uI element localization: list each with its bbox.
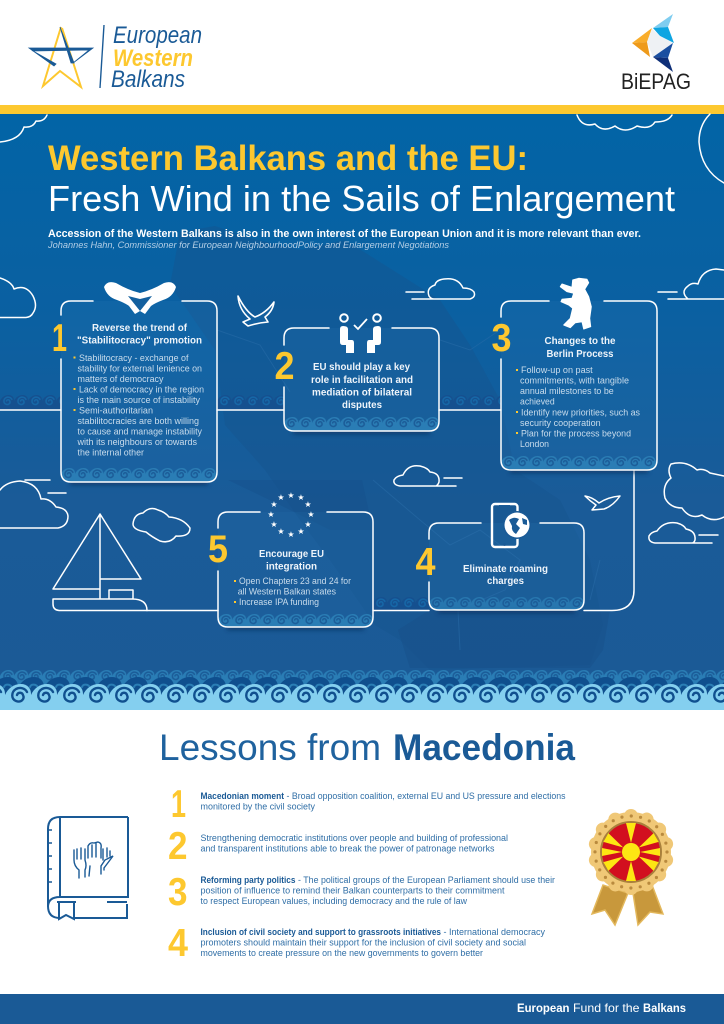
icon: sailing boat (53, 514, 147, 610)
lesson 4 (168, 922, 546, 965)
icon: book with raised hands (48, 817, 128, 919)
panel 4 heading: charges (487, 575, 524, 587)
heading: Lessons from Macedonia: Lessons from (159, 727, 381, 768)
panel 5 bullets: Increase IPA funding (239, 597, 319, 607)
panel 1 bullets: to cause and manage instability (78, 426, 203, 436)
lesson 3: 3 (168, 871, 188, 914)
panel 1 bullets: stability for external lenience on (78, 364, 202, 374)
icon: EU stars: ★ (277, 493, 285, 502)
panel 2 heading (311, 361, 413, 411)
icon: handshake (104, 282, 176, 314)
panel 3 bullets (516, 365, 641, 449)
lesson 2: 2 (168, 825, 188, 868)
panel 2 heading: mediation of bilateral (312, 386, 412, 398)
panel 3 bullets: annual milestones to be (520, 386, 614, 396)
panel 5 bullets: Open Chapters 23 and 24 for (239, 576, 351, 586)
icon: phone with globe (492, 504, 531, 547)
panel 2 (274, 314, 439, 434)
lesson 2: Strengthening democratic institutions over people and building of professional (200, 833, 508, 843)
icon: EU stars: ★ (267, 510, 275, 519)
panel 1 bullets: with its neighbours or towards (76, 437, 198, 447)
footer bar: European (517, 1001, 570, 1015)
icon: bird (585, 496, 620, 510)
title: Western Balkans and the EU: (48, 139, 528, 178)
number 5: 5 (208, 528, 228, 571)
lesson 4: movements to create pressure on the new governments to govern better (200, 948, 483, 958)
panel 2 heading: disputes (342, 399, 382, 411)
panel 3 heading: Changes to the (544, 335, 616, 347)
lesson 3: to respect European values, including democracy and the rule of law (200, 896, 468, 906)
footer bar (0, 994, 724, 1024)
icon: EU stars: ★ (287, 491, 295, 500)
lesson 3: - The political groups of the European Parliament should use their (298, 875, 555, 885)
icon: bird (238, 296, 274, 326)
number 1: 1 (52, 317, 67, 360)
panel 4 heading (463, 563, 548, 587)
logo: European Western Balkans (29, 22, 202, 93)
icon: EU stars: ★ (287, 530, 295, 539)
panel 1 bullets: Stabilitocracy - exchange of (79, 353, 189, 363)
panel 3 bullets: Follow-up on past (521, 365, 593, 375)
panel 5 (208, 491, 373, 630)
panel 1 (52, 282, 217, 485)
logo: European Western Balkans: Western (113, 45, 193, 72)
logo: European Western Balkans: Balkans (111, 66, 185, 93)
icon: EU stars: ★ (270, 500, 278, 509)
panel 5 heading: Encourage EU (259, 548, 324, 560)
panel 1 bullets: Semi-authoritarian (79, 406, 153, 416)
ocean waves (0, 670, 724, 710)
number 3: 3 (492, 317, 512, 360)
icon: EU stars: ★ (297, 493, 305, 502)
quote (47, 228, 641, 250)
lesson 2 (168, 825, 508, 868)
connector lines (0, 410, 634, 610)
panel 4 heading: Eliminate roaming (463, 563, 548, 575)
panel 3 bullets: London (520, 439, 549, 449)
icon: rosette with Macedonian flag (588, 809, 674, 925)
panel 3 (492, 278, 657, 473)
logo: European Western Balkans: European (113, 22, 202, 49)
panel 4 (416, 504, 584, 613)
lesson 3: Reforming party politics (200, 875, 296, 885)
lesson 1 (171, 783, 566, 826)
panel 5 heading (259, 548, 324, 572)
logo: BiEPAG (621, 14, 691, 94)
panel 3 bullets: security cooperation (520, 418, 601, 428)
panel 3 bullets: commitments, with tangible (520, 376, 629, 386)
panel 3 bullets: Identify new priorities, such as (521, 408, 641, 418)
lesson 3 (168, 871, 555, 914)
panel 3 bullets: achieved (520, 396, 555, 406)
yellow band (0, 105, 724, 114)
panel 1 bullets (74, 353, 204, 458)
icon: EU stars (267, 491, 315, 539)
panel 5 bullets (234, 576, 351, 607)
clouds (0, 114, 724, 543)
panel 2 heading: role in facilitation and (311, 374, 413, 386)
heading: Lessons from Macedonia: Macedonia (393, 727, 575, 768)
sea background panel (0, 114, 724, 710)
lesson 4: promoters should maintain their support for the inclusion of civil society and social (200, 938, 526, 948)
logo: BiEPAG: BiEPAG (621, 69, 691, 94)
quote: Accession of the Western Balkans is also in the own interest of the European Union and it is more relevant than ever. (48, 228, 641, 240)
panel 1 heading (77, 322, 202, 346)
lessons list (168, 783, 566, 965)
icon: EU stars: ★ (304, 520, 312, 529)
footer bar: Balkans (643, 1001, 686, 1015)
panel 1 bullets: is the main source of instability (78, 395, 201, 405)
panel 1 bullets: the internal other (78, 448, 144, 458)
background map of the Balkans (170, 226, 610, 670)
icon: EU stars: ★ (304, 500, 312, 509)
connector wave strips (0, 395, 501, 610)
panel 5 heading: integration (266, 560, 317, 572)
number 2: 2 (274, 345, 294, 388)
icon: Berlin bear (560, 278, 591, 329)
lesson 4: 4 (168, 922, 188, 965)
lesson 1: 1 (171, 783, 186, 826)
icon: EU stars: ★ (277, 527, 285, 536)
lesson 4: Inclusion of civil society and support to grassroots initiatives (200, 927, 441, 937)
panel 1 bullets: matters of democracy (78, 374, 164, 384)
panel 1 heading: "Stabilitocracy" promotion (77, 334, 202, 346)
title: Fresh Wind in the Sails of Enlargement (48, 178, 675, 219)
icon: EU stars: ★ (307, 510, 315, 519)
number 4: 4 (416, 541, 436, 584)
title (48, 139, 675, 219)
lesson 3: position of influence to remind their Balkan counterparts to their commitment (200, 886, 505, 896)
panel 3 bullets: Plan for the process beyond (521, 428, 631, 438)
panel 3 heading: Berlin Process (546, 348, 614, 360)
lesson 2: and transparent institutions able to break the power of patronage networks (200, 844, 495, 854)
panel 1 bullets: stabilitocracies are both willing (78, 416, 199, 426)
panel 1 heading: Reverse the trend of (92, 322, 187, 334)
icon: two people with check mark (340, 314, 381, 353)
panel 1 bullets: Lack of democracy in the region (79, 384, 204, 394)
panel 2 heading: EU should play a key (313, 361, 410, 373)
lesson 4: - International democracy (444, 927, 546, 937)
panel 3 heading (544, 335, 616, 360)
lesson 1: monitored by the civil society (200, 802, 316, 812)
heading: Lessons from Macedonia (159, 727, 575, 768)
lesson 1: - Broad opposition coalition, external EU and US pressure and elections (286, 791, 566, 801)
lesson 1: Macedonian moment (200, 791, 284, 801)
icon: EU stars: ★ (297, 527, 305, 536)
icon: EU stars: ★ (270, 520, 278, 529)
footer bar: Fund for the (573, 1001, 640, 1015)
quote: Johannes Hahn, Commissioner for European NeighbourhoodPolicy and Enlargement Negotiations (47, 240, 450, 250)
panel 5 bullets: all Western Balkan states (238, 586, 337, 596)
